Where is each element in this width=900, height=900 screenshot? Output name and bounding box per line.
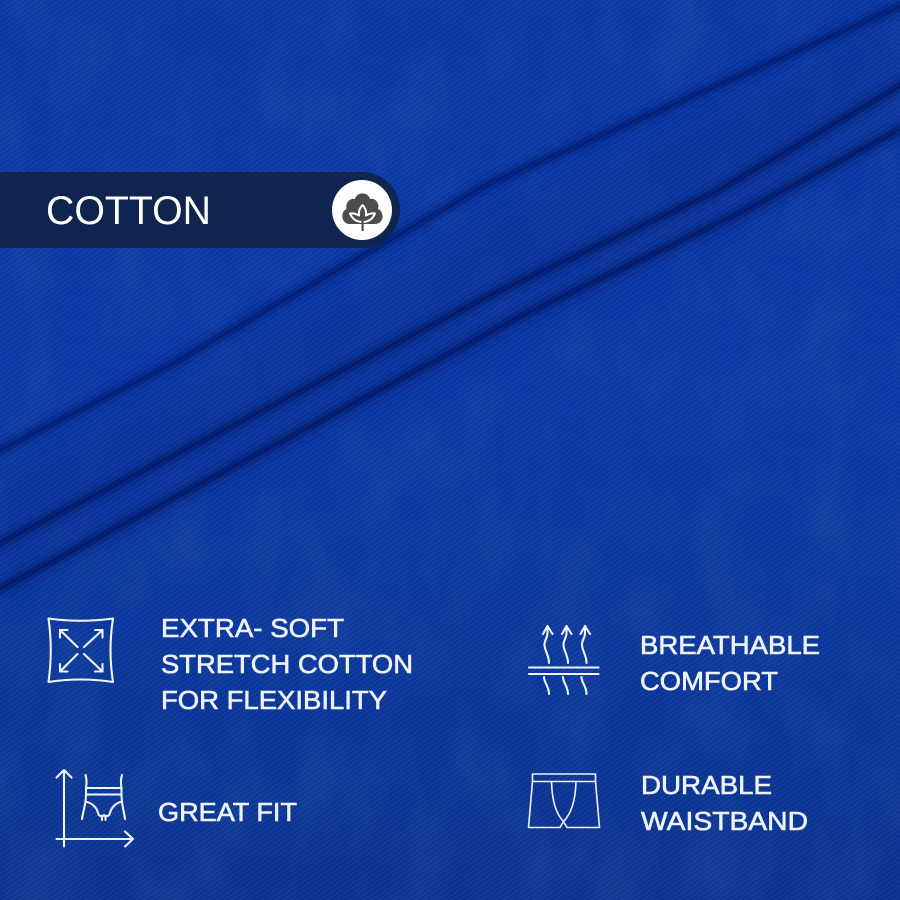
feature: great fit xyxy=(56,770,297,846)
banner title: COTTON xyxy=(46,189,211,233)
banner: cotton label xyxy=(0,172,400,248)
feature text: BREATHABLE xyxy=(640,632,820,660)
icon: cotton boll xyxy=(332,180,392,240)
icon: boxer briefs xyxy=(528,774,600,828)
feature text: GREAT FIT xyxy=(158,799,297,827)
feature: extra-soft stretch cotton xyxy=(48,615,413,715)
feature text xyxy=(161,615,413,715)
icon: breathable layers with rising air xyxy=(529,626,598,694)
feature text: FOR FLEXIBILITY xyxy=(161,687,387,715)
banner bar xyxy=(0,172,400,248)
icon: measurement axes with body xyxy=(56,770,133,846)
feature: breathable comfort xyxy=(529,626,820,696)
feature text: WAISTBAND xyxy=(641,808,808,836)
feature text xyxy=(640,632,820,696)
feature text: EXTRA- SOFT xyxy=(161,615,344,643)
feature text: COMFORT xyxy=(640,668,778,696)
feature text xyxy=(641,772,808,836)
icon: stretch square with arrows xyxy=(48,618,113,682)
feature text: DURABLE xyxy=(641,772,772,800)
feature text: STRETCH COTTON xyxy=(161,651,413,679)
feature: durable waistband xyxy=(528,772,808,836)
